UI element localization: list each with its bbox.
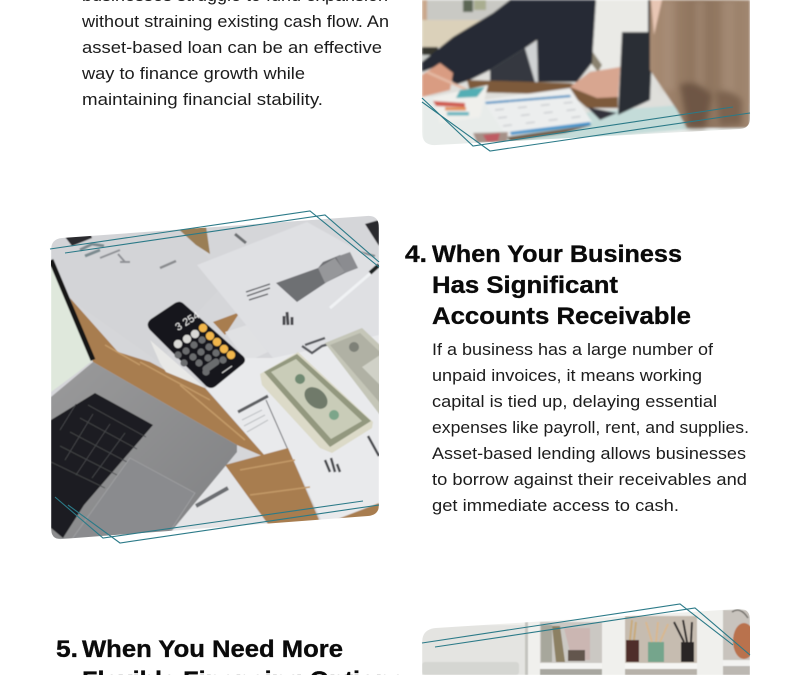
heading: section 4 — [405, 241, 691, 330]
calculator phone — [148, 302, 245, 388]
lower white paper — [206, 335, 379, 522]
gap under arm — [488, 46, 536, 84]
tablet — [587, 107, 617, 120]
left document — [437, 83, 490, 101]
money stack 2 — [325, 328, 380, 415]
heading: section 4: Accounts Receivable — [432, 303, 691, 330]
text block: section 4 paragraph: unpaid invoices, it means working — [432, 366, 702, 385]
hands — [422, 63, 453, 97]
heading: section 4: When Your Business — [432, 241, 682, 268]
text block: section 3 closing paragraph: without straining existing cash flow. An — [81, 12, 389, 31]
lower wood — [225, 448, 320, 527]
text block: section 4 paragraph — [432, 340, 749, 515]
laptop base — [51, 362, 237, 539]
lower sheet under laptop — [172, 466, 268, 530]
white stack — [224, 326, 267, 358]
clips — [65, 236, 92, 246]
client hair — [650, 0, 750, 128]
small object — [473, 132, 508, 143]
heading: section 4: Has Significant — [432, 272, 618, 299]
photo: calculator, cash, charts and laptop on desk — [50, 211, 380, 543]
text block: section 3 closing paragraph: way to finance growth while — [81, 64, 305, 83]
heading: section 4: 4. — [405, 241, 427, 268]
shirt — [590, 0, 648, 70]
photo: office shelves — [422, 604, 755, 675]
main report — [483, 88, 592, 137]
right report sheet — [197, 222, 379, 358]
text block: section 4 paragraph: expenses like payroll, rent, and supplies. — [432, 418, 749, 437]
desk — [467, 80, 618, 108]
keyboard — [51, 393, 153, 538]
text block: section 4 paragraph: Asset-based lending allows businesses — [432, 444, 746, 463]
text block: section 3 closing paragraph: maintaining financial stability. — [82, 90, 323, 109]
text block: section 4 paragraph: If a business has a large number of — [432, 340, 713, 359]
photo: calculator, cash, charts and laptop on desk: 3 254 — [173, 309, 202, 334]
text block: section 3 closing paragraph: asset-based loan can be an effective — [82, 38, 382, 57]
text block: section 3 closing paragraph — [81, 0, 389, 109]
heading: section 5 — [56, 636, 405, 675]
laptop screen — [51, 262, 93, 392]
bottom light surface — [422, 96, 744, 145]
text block: section 4 paragraph: get immediate access to cash. — [432, 496, 679, 515]
trackpad — [72, 458, 195, 539]
heading: section 5: When You Need More — [82, 636, 343, 663]
photo: advisor reviewing financial report with client — [422, 0, 760, 151]
wood beside report — [70, 298, 267, 458]
pen — [330, 272, 372, 308]
left report sheet — [51, 226, 228, 363]
suit jacket — [422, 0, 596, 85]
heading: section 5: 5. — [56, 636, 78, 663]
money stack 1 — [260, 352, 373, 453]
text block: section 4 paragraph: to borrow against their receivables and — [432, 470, 747, 489]
text block: section 4 paragraph: capital is tied up, delaying essential — [432, 392, 717, 411]
